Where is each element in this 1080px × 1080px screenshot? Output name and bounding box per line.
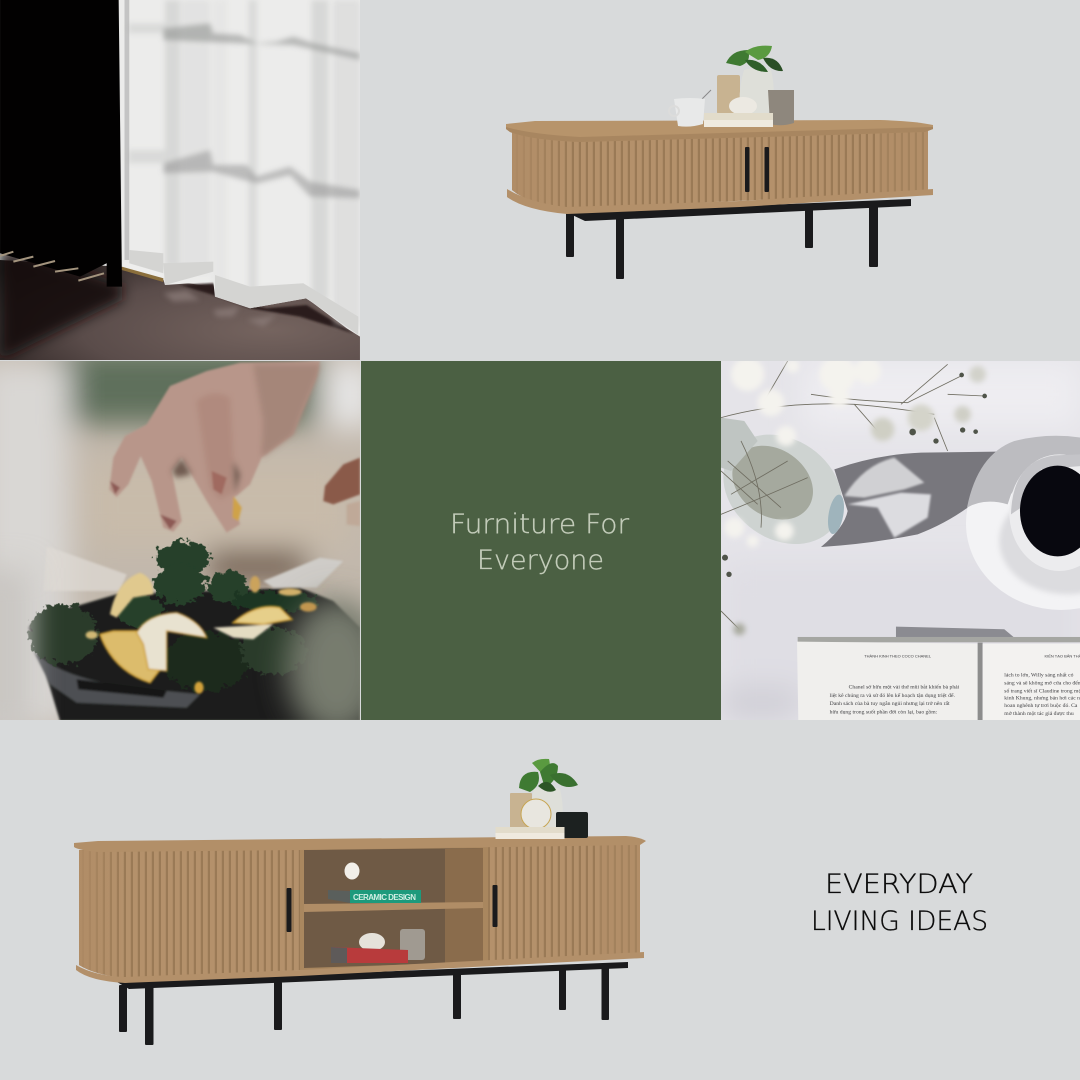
book text: THÀNH KINH THEO COCO CHANEL <box>864 654 932 659</box>
book text: mở thành một tác giả được thu <box>1004 711 1074 717</box>
heading: Furniture For Everyone <box>450 509 630 576</box>
baby's breath flowers <box>721 361 984 629</box>
book text <box>830 654 1080 717</box>
book text: hữu dụng trong suốt phần đời còn lại, bao gồm: <box>830 708 938 715</box>
console handles <box>286 888 292 932</box>
curtain <box>164 280 360 336</box>
console open shelves: CERAMIC DESIGN <box>353 893 416 902</box>
greens <box>28 541 317 691</box>
decor on coffee table <box>669 46 794 127</box>
blurred foreground edges <box>0 568 360 720</box>
product: TV console with decor <box>74 759 646 1045</box>
shelf decor <box>400 929 425 960</box>
lemon slices <box>86 573 317 694</box>
cable hole <box>344 862 360 880</box>
book text: Chanel sở hữu một vài thứ mũi bắt khiến bà phải <box>849 684 960 691</box>
decor on console <box>496 759 588 839</box>
book text: Danh sách của bà tuy ngắn ngủi nhưng lại trở nên rất <box>830 700 950 707</box>
photo: hand garnishing food <box>0 348 387 738</box>
plant <box>519 759 578 792</box>
book: Ceramic Design <box>328 890 350 903</box>
floor <box>0 260 360 360</box>
shadow of vase <box>821 452 998 547</box>
photo: sheer curtain and dark drape <box>0 0 360 360</box>
pan <box>28 546 360 721</box>
console body <box>79 843 640 978</box>
console base lip <box>76 952 644 983</box>
hand <box>109 361 360 533</box>
heading: Everyday Living Ideas: LIVING IDEAS <box>811 906 988 937</box>
glass vase <box>721 418 844 544</box>
saucer and coffee cup <box>966 492 1080 610</box>
console top <box>74 836 646 852</box>
heading: Everyday Living Ideas <box>811 869 988 937</box>
book text: lách to lớn, Willy sáng nhất có <box>1004 671 1074 678</box>
book text: liệt kê chúng ra và sử đó lên kế hoạch tận dụng triệt để. <box>830 692 956 699</box>
console open shelves <box>300 847 488 971</box>
heading: Furniture For Everyone: Furniture For <box>450 509 630 540</box>
coffee table handles <box>745 147 750 192</box>
dark drape <box>0 247 122 360</box>
panel: green title block <box>361 361 721 720</box>
book text: hoan nghênh tự trơi buộc đó. Ca <box>1004 703 1078 709</box>
open book <box>797 627 1080 721</box>
photo: flowers, coffee and open book <box>702 356 1080 721</box>
plant <box>726 46 783 72</box>
coffee table base lip <box>507 189 933 214</box>
coffee table top <box>506 120 933 142</box>
product: coffee table with decor <box>506 46 933 279</box>
book text: sáng và sẽ không mở cửa cho đến <box>1004 679 1080 686</box>
coffee table frame and legs <box>566 199 911 279</box>
curtain hem <box>129 250 358 335</box>
console frame and legs <box>117 962 628 1045</box>
heading: Furniture For Everyone: Everyone <box>477 545 604 576</box>
heading: Everyday Living Ideas: EVERYDAY <box>825 869 973 900</box>
coffee table body <box>512 131 928 209</box>
